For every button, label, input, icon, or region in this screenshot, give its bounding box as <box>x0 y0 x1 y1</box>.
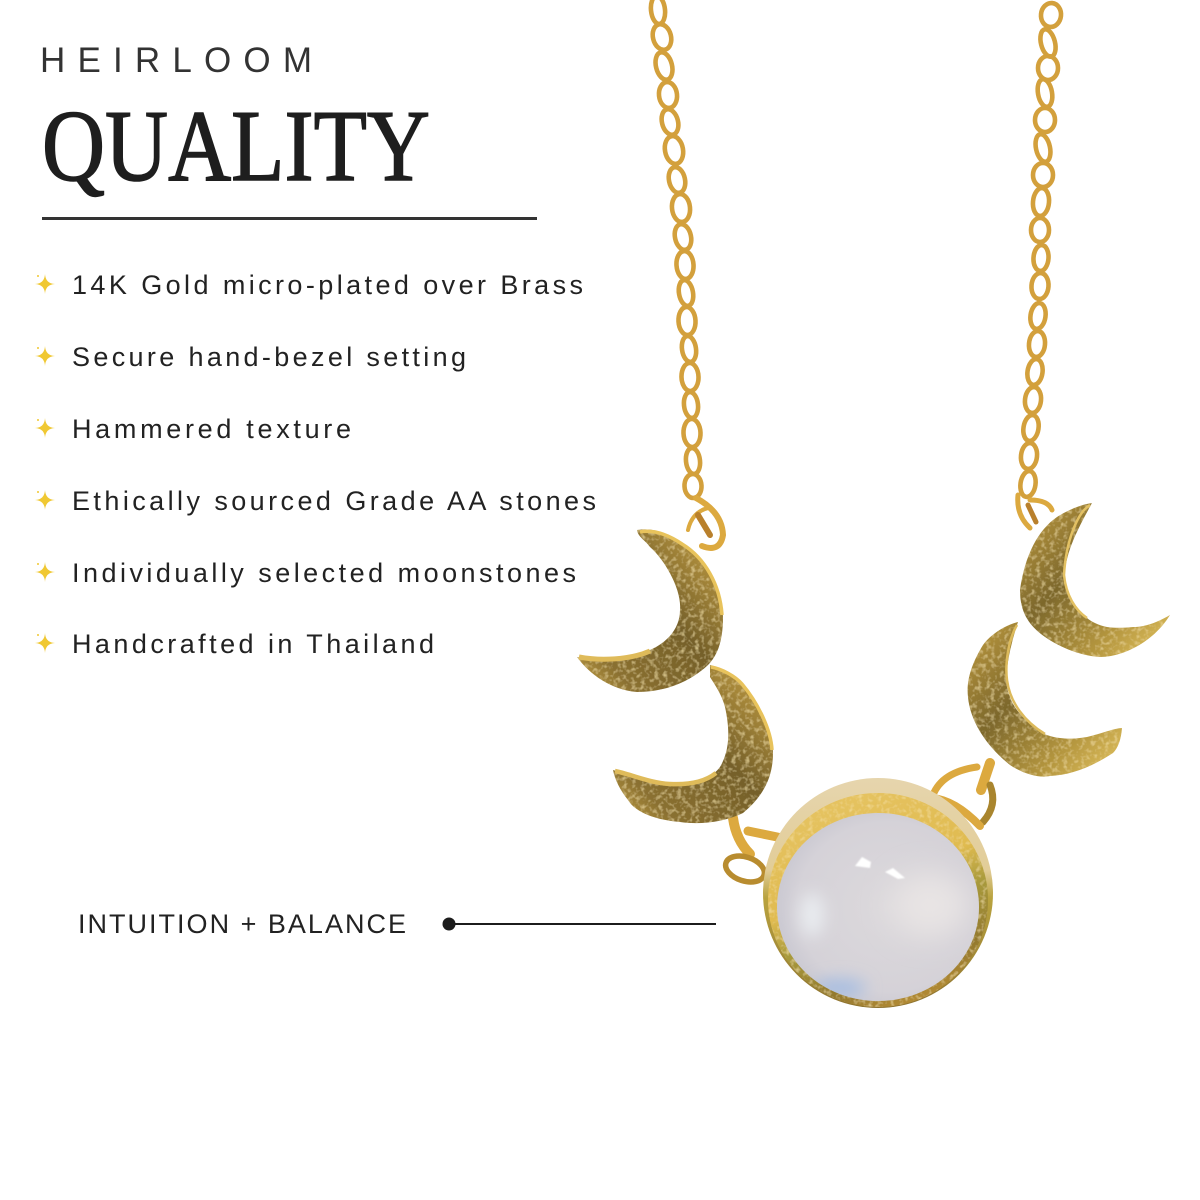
infographic canvas <box>35 0 1170 1008</box>
list item: hammered texture: Hammered texture <box>72 414 351 444</box>
connectors and jump rings <box>688 495 1052 887</box>
callout leader line <box>442 918 716 930</box>
crescent moon: lower right <box>968 622 1122 777</box>
callout label: INTUITION + BALANCE <box>78 909 406 939</box>
necklace illustration <box>577 0 1170 1008</box>
list item: handcrafted: Handcrafted in Thailand <box>72 629 434 659</box>
right chain <box>1019 2 1062 498</box>
crescent moon: upper left <box>577 529 723 692</box>
pendant back rim <box>763 778 993 1008</box>
feature list <box>35 270 596 659</box>
title: QUALITY: QUALITY <box>42 90 430 203</box>
list item: gold plating: 14K Gold micro-plated over Brass <box>72 270 583 300</box>
eyebrow: HEIRLOOM: HEIRLOOM <box>40 41 312 80</box>
heading rule <box>42 217 537 220</box>
crescent moon: lower left <box>613 665 773 823</box>
callout <box>78 909 716 939</box>
stone sheen and glow <box>800 873 968 997</box>
stone highlights <box>855 857 905 879</box>
gold bezel <box>768 793 988 1007</box>
moonstone <box>777 813 979 1001</box>
list item: bezel setting: Secure hand-bezel setting <box>72 342 466 372</box>
list item: ethical stones: Ethically sourced Grade AA stones <box>72 486 596 516</box>
moonstone pendant <box>763 778 993 1008</box>
left chain <box>650 0 702 498</box>
heading block <box>40 41 537 220</box>
list item: moonstones: Individually selected moonstones <box>72 558 576 588</box>
crescent moon: upper right <box>1020 503 1170 657</box>
